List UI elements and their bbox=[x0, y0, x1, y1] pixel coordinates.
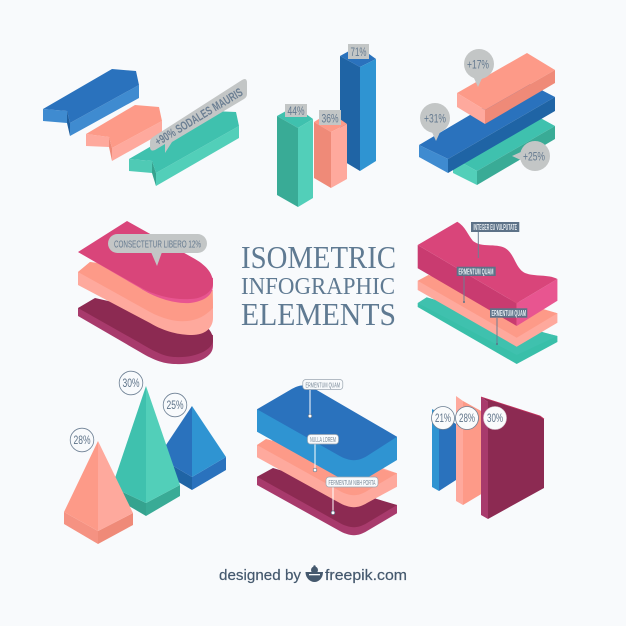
panel: rounded rectangles stack bbox=[257, 380, 397, 535]
icon: freepik logo bbox=[306, 565, 323, 582]
salmon slab bbox=[457, 53, 555, 124]
label 25%: 25% bbox=[166, 400, 184, 412]
label 71%: 71% bbox=[350, 45, 367, 59]
panel: rounded layers bbox=[78, 221, 213, 364]
label: nulla lorem bbox=[308, 434, 338, 472]
label: ermentum quam: ERMENTUM QUAM bbox=[306, 380, 340, 390]
label: fermentum nibh porta bbox=[326, 477, 378, 514]
title line: isometric: ISOMETRIC bbox=[241, 239, 396, 275]
salmon plate bbox=[257, 435, 397, 507]
blue bar 71% bbox=[340, 46, 376, 171]
callout: consectetur libero 12%: CONSECTETUR LIBERO 12% bbox=[114, 238, 201, 250]
teal arrow bbox=[129, 111, 239, 186]
label 30%: 30% bbox=[487, 413, 503, 425]
label: ermentum quam lower bbox=[490, 308, 527, 345]
label 36%: 36% bbox=[322, 112, 339, 126]
maroon plate bbox=[257, 468, 397, 535]
maroon panel bbox=[481, 397, 544, 519]
panel: wavy layers: INTEGER EU VULPUTATE bbox=[474, 223, 517, 232]
salmon panel bbox=[456, 396, 483, 505]
label 36% bbox=[319, 110, 341, 126]
salmon wavy layer bbox=[418, 275, 557, 347]
teal wavy layer bbox=[418, 297, 557, 364]
label 28%: 28% bbox=[459, 413, 475, 425]
callout: +90% sodales mauris: +90% SODALES MAURIS bbox=[152, 85, 245, 149]
blue panel bbox=[432, 409, 456, 491]
label: nulla lorem: NULLA LOREM bbox=[310, 435, 336, 444]
callout +31%: +31% bbox=[424, 112, 446, 126]
salmon arrow bbox=[86, 105, 162, 161]
callout: +90% sodales mauris bbox=[150, 79, 247, 153]
teal slab bbox=[453, 115, 555, 185]
title line: infographic: INFOGRAPHIC bbox=[241, 274, 395, 300]
panel: wavy layers: ERMENTUM QUAM bbox=[492, 309, 526, 318]
footer credit bbox=[219, 565, 407, 584]
label: ermentum quam bbox=[303, 380, 343, 418]
blue slab bbox=[419, 82, 555, 173]
callout +17%: +17% bbox=[467, 58, 489, 72]
panel: wavy layers bbox=[418, 222, 557, 364]
title line: elements: ELEMENTS bbox=[241, 296, 396, 332]
callout +25%: +25% bbox=[523, 150, 545, 164]
designed by: designed by bbox=[219, 568, 302, 584]
salmon layer bbox=[78, 262, 213, 335]
title bbox=[241, 239, 396, 332]
freepik.com: freepik.com bbox=[325, 568, 407, 584]
panel: stacked slabs bbox=[419, 49, 555, 185]
blue pyramid bbox=[158, 406, 226, 490]
callout: consectetur libero 12% bbox=[108, 234, 207, 266]
label 44%: 44% bbox=[288, 104, 305, 118]
label 28% bbox=[70, 428, 94, 452]
panel: bar chart bbox=[277, 44, 376, 207]
label: ermentum quam upper bbox=[457, 267, 496, 303]
label: integer eu vulputate bbox=[471, 222, 519, 258]
label: ermentum quam upper: ERMENTUM QUAM bbox=[458, 268, 494, 276]
panel: arrow ribbons bbox=[43, 69, 247, 186]
teal bar 44% bbox=[277, 106, 313, 207]
maroon layer bbox=[78, 298, 213, 364]
label 25% bbox=[163, 393, 187, 417]
label 71% bbox=[348, 44, 369, 59]
pink wavy layer bbox=[418, 222, 557, 326]
teal pyramid bbox=[112, 386, 180, 516]
pink layer bbox=[78, 221, 213, 303]
label 30%: 30% bbox=[122, 378, 140, 390]
label 30% bbox=[119, 371, 143, 395]
label 28%: 28% bbox=[74, 435, 90, 447]
blue arrow bbox=[43, 69, 139, 136]
panel: vertical panels bbox=[432, 396, 544, 519]
panel: pyramids bbox=[64, 371, 226, 544]
salmon bar 36% bbox=[314, 112, 347, 188]
blue plate bbox=[257, 385, 397, 482]
salmon pyramid bbox=[64, 441, 133, 544]
label 21%: 21% bbox=[435, 413, 451, 425]
label: fermentum nibh porta: FERMENTUM NIBH PORTA bbox=[328, 478, 376, 487]
